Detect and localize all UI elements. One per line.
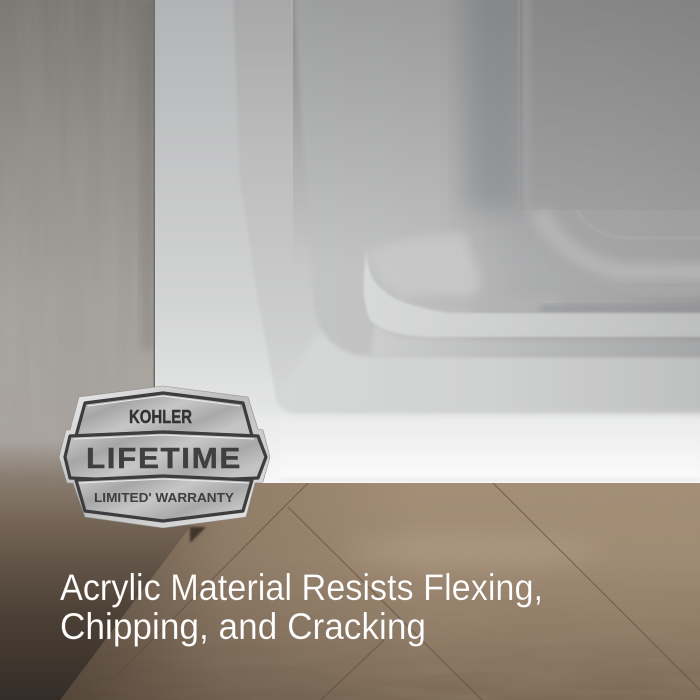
headline caption: Chipping, and Cracking xyxy=(60,606,426,647)
dark vertical corner shade xyxy=(465,0,520,210)
stone wall xyxy=(0,0,206,700)
badge bottom panel xyxy=(76,476,252,521)
ledge front band xyxy=(364,250,700,337)
badge middle band xyxy=(65,432,266,482)
wood herringbone floor xyxy=(0,482,700,700)
limited warranty label: LIMITED' WARRANTY xyxy=(94,491,235,505)
sloped deck xyxy=(377,357,700,416)
headline caption: Acrylic Material Resists Flexing, xyxy=(60,567,543,608)
badge top panel xyxy=(76,393,252,436)
underside of ledge xyxy=(372,330,700,354)
shadow above ledge xyxy=(540,304,670,312)
badge highlight lines xyxy=(74,396,254,483)
warranty badge xyxy=(59,386,270,528)
badge silver plate xyxy=(59,386,270,528)
brand name: KOHLER xyxy=(129,407,192,427)
lifetime label: LIFETIME xyxy=(86,443,242,475)
bathtub white surround xyxy=(150,0,700,495)
interior wall xyxy=(293,0,700,356)
headline caption xyxy=(60,567,543,647)
upper step xyxy=(520,0,700,247)
seat ledge xyxy=(393,236,478,296)
bathtub interior with ledges xyxy=(277,0,700,413)
